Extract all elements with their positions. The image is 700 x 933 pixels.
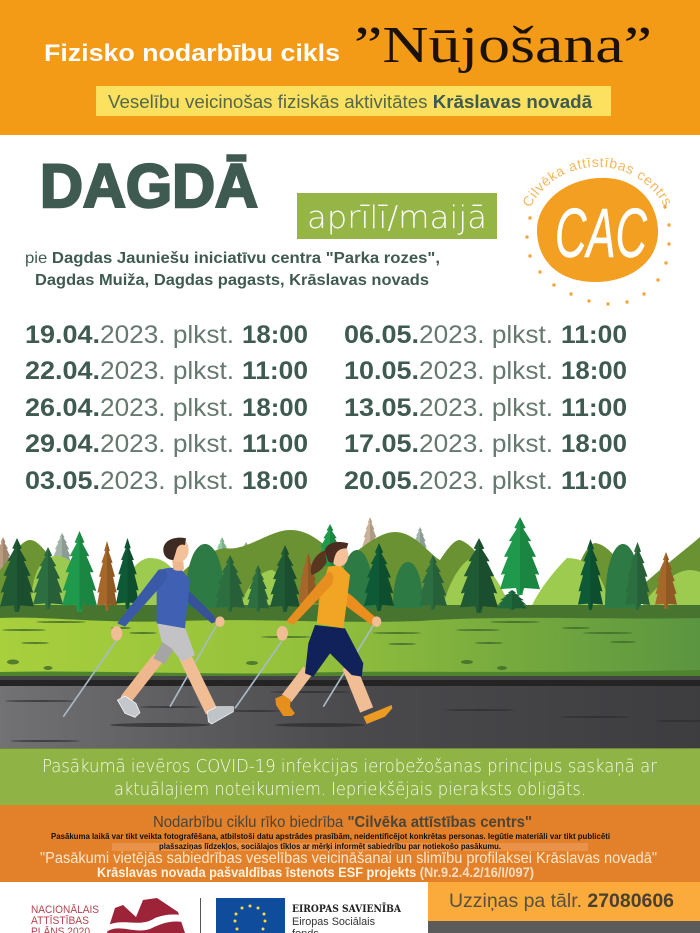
schedule dates: 2023. plkst. <box>100 321 234 349</box>
schedule dates: 29.04. <box>25 430 100 458</box>
yellow tagline bar: Veselību veicinošas fiziskās aktivitātes Krāslavas novadā <box>108 92 593 112</box>
schedule dates: 2023. plkst. <box>100 467 234 495</box>
schedule dates: 11:00 <box>561 467 627 495</box>
months label: aprīlī/maijā <box>307 200 487 236</box>
EU text <box>292 902 402 933</box>
illustration: nordic walkers in landscape <box>0 517 700 750</box>
header subtitle: cycle: Fizisko nodarbību cikls <box>44 40 340 67</box>
contact panel <box>428 882 700 933</box>
organiser band: Pasākuma laikā var tikt veikta fotografēšana, atbilstoši datu apstrādes prasībām, neidentificējot konkrētas personas. Iegūtie materiāli var tikt publicēti <box>51 832 610 841</box>
schedule dates: 19.04. <box>25 321 100 349</box>
walkers <box>63 538 392 724</box>
faint stripe behind small print <box>112 843 588 851</box>
schedule dates: 06.05. <box>344 321 419 349</box>
schedule dates: 18:00 <box>561 357 627 385</box>
schedule dates: 18:00 <box>242 321 308 349</box>
months label <box>297 193 497 239</box>
schedule dates: 11:00 <box>242 357 308 385</box>
logo letters: CAC <box>555 194 647 272</box>
venue text: Dagdas Muiža, Dagdas pagasts, Krāslavas novads <box>35 272 429 289</box>
man walking with poles <box>63 538 233 724</box>
schedule dates: 26.04. <box>25 394 100 422</box>
logo: Nacionālais attīstības plāns <box>31 898 185 933</box>
schedule dates: 11:00 <box>561 321 627 349</box>
schedule dates: 22.04. <box>25 357 100 385</box>
organiser band: "Pasākumi vietējās sabiedrības veselības veicināšanai un slimību profilaksei Krāslavas novadā" <box>40 850 657 867</box>
logo: Nacionālais attīstības plāns: NACIONĀLAIS <box>31 904 99 916</box>
schedule dates: 2023. plkst. <box>419 321 553 349</box>
schedule dates: 2023. plkst. <box>419 430 553 458</box>
yellow tagline bar <box>96 86 611 116</box>
logo: Nacionālais attīstības plāns: ATTĪSTĪBAS <box>31 915 89 927</box>
meadow <box>0 605 700 678</box>
logo blob <box>537 178 658 282</box>
contact panel: Uzziņas pa tālr. 27080606 <box>449 891 674 912</box>
road <box>0 676 700 750</box>
organiser band <box>0 805 700 882</box>
schedule dates: 18:00 <box>242 467 308 495</box>
logo arc text: Cilvēka attīstības centrs <box>524 158 670 206</box>
header title: Nūjošana: ”Nūjošana” <box>354 17 652 74</box>
schedule dates: 11:00 <box>242 430 308 458</box>
town heading: DAGDĀ <box>40 152 258 220</box>
distant hills <box>0 517 700 610</box>
schedule dates: 13.05. <box>344 394 419 422</box>
schedule dates: 10.05. <box>344 357 419 385</box>
schedule dates: 2023. plkst. <box>419 357 553 385</box>
schedule dates: 2023. plkst. <box>419 467 553 495</box>
schedule dates: 2023. plkst. <box>100 430 234 458</box>
schedule dates: 17.05. <box>344 430 419 458</box>
woman walking with poles <box>235 542 392 724</box>
CAC logo <box>524 158 671 306</box>
covid notice band <box>0 749 700 805</box>
schedule dates: 2023. plkst. <box>100 357 234 385</box>
logo: European Union flag <box>216 898 285 933</box>
schedule dates: 2023. plkst. <box>100 394 234 422</box>
tree line <box>0 517 677 613</box>
organiser band: Krāslavas novada pašvaldības īstenots ESF projekts (Nr.9.2.4.2/16/I/097) <box>97 864 534 880</box>
header band <box>0 0 700 135</box>
schedule dates <box>25 321 627 495</box>
logos strip <box>0 882 428 933</box>
logo dots <box>525 205 671 306</box>
EU text: Eiropas Sociālais <box>292 916 375 928</box>
schedule dates: 11:00 <box>561 394 627 422</box>
organiser band: Nodarbību ciklu rīko biedrība "Cilvēka attīstības centrs" <box>153 814 532 831</box>
schedule dates: 18:00 <box>242 394 308 422</box>
EU text: EIROPAS SAVIENĪBA <box>292 902 402 915</box>
schedule dates: 20.05. <box>344 467 419 495</box>
covid notice band: aktuālajiem noteikumiem. Iepriekšējais pieraksts obligāts. <box>114 779 586 800</box>
venue text: pie Dagdas Jauniešu iniciatīvu centra "Parka rozes", <box>25 250 440 267</box>
venue text <box>25 250 440 289</box>
schedule dates: 2023. plkst. <box>419 394 553 422</box>
schedule dates: 18:00 <box>561 430 627 458</box>
organiser band: plašsaziņas līdzekļos, sociālajos tīklos ar mērķi informēt sabiedrību par notiekošo pasākumu. <box>159 842 501 851</box>
schedule dates: 03.05. <box>25 467 100 495</box>
covid notice band: Pasākumā ievēros COVID-19 infekcijas ierobežošanas principus saskaņā ar <box>42 756 658 777</box>
